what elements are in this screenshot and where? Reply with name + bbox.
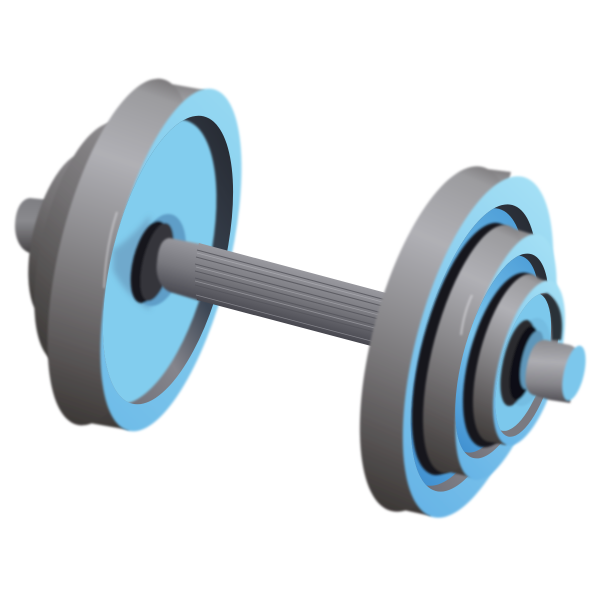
right plate recess xyxy=(410,204,534,492)
left main plate xyxy=(46,77,243,433)
left plate grey rim xyxy=(19,65,221,439)
right small plate xyxy=(461,270,566,449)
small plate blue face xyxy=(479,273,579,453)
small plate recess xyxy=(495,292,564,437)
right plate grey rim xyxy=(329,151,545,527)
smooth handle section xyxy=(157,238,200,301)
left plate rim highlight xyxy=(104,212,117,288)
middle plate contact shadow xyxy=(390,212,542,486)
left back plates xyxy=(13,112,163,374)
handle xyxy=(157,238,390,351)
middle plate highlight xyxy=(461,295,472,335)
right plate rim highlight xyxy=(434,277,444,318)
small plate contact shadow xyxy=(447,264,561,456)
right plate blue face xyxy=(373,161,583,533)
left end stub xyxy=(15,198,60,256)
middle plate grey rim xyxy=(402,215,548,483)
left plate recess xyxy=(102,116,234,404)
left hub collar xyxy=(123,209,195,311)
dumbbell illustration xyxy=(14,77,587,520)
right hub collar xyxy=(493,314,559,410)
middle plate recess xyxy=(455,254,548,458)
stub end cap xyxy=(558,343,590,403)
knurled grip xyxy=(194,243,390,351)
right middle plate xyxy=(410,221,558,479)
middle plate blue face xyxy=(434,224,578,490)
right end stub xyxy=(525,340,590,403)
small plate grey rim xyxy=(458,266,562,450)
left plate face shadow near rim xyxy=(113,215,150,310)
left plate blue face xyxy=(72,75,270,445)
right main plate xyxy=(358,164,554,520)
